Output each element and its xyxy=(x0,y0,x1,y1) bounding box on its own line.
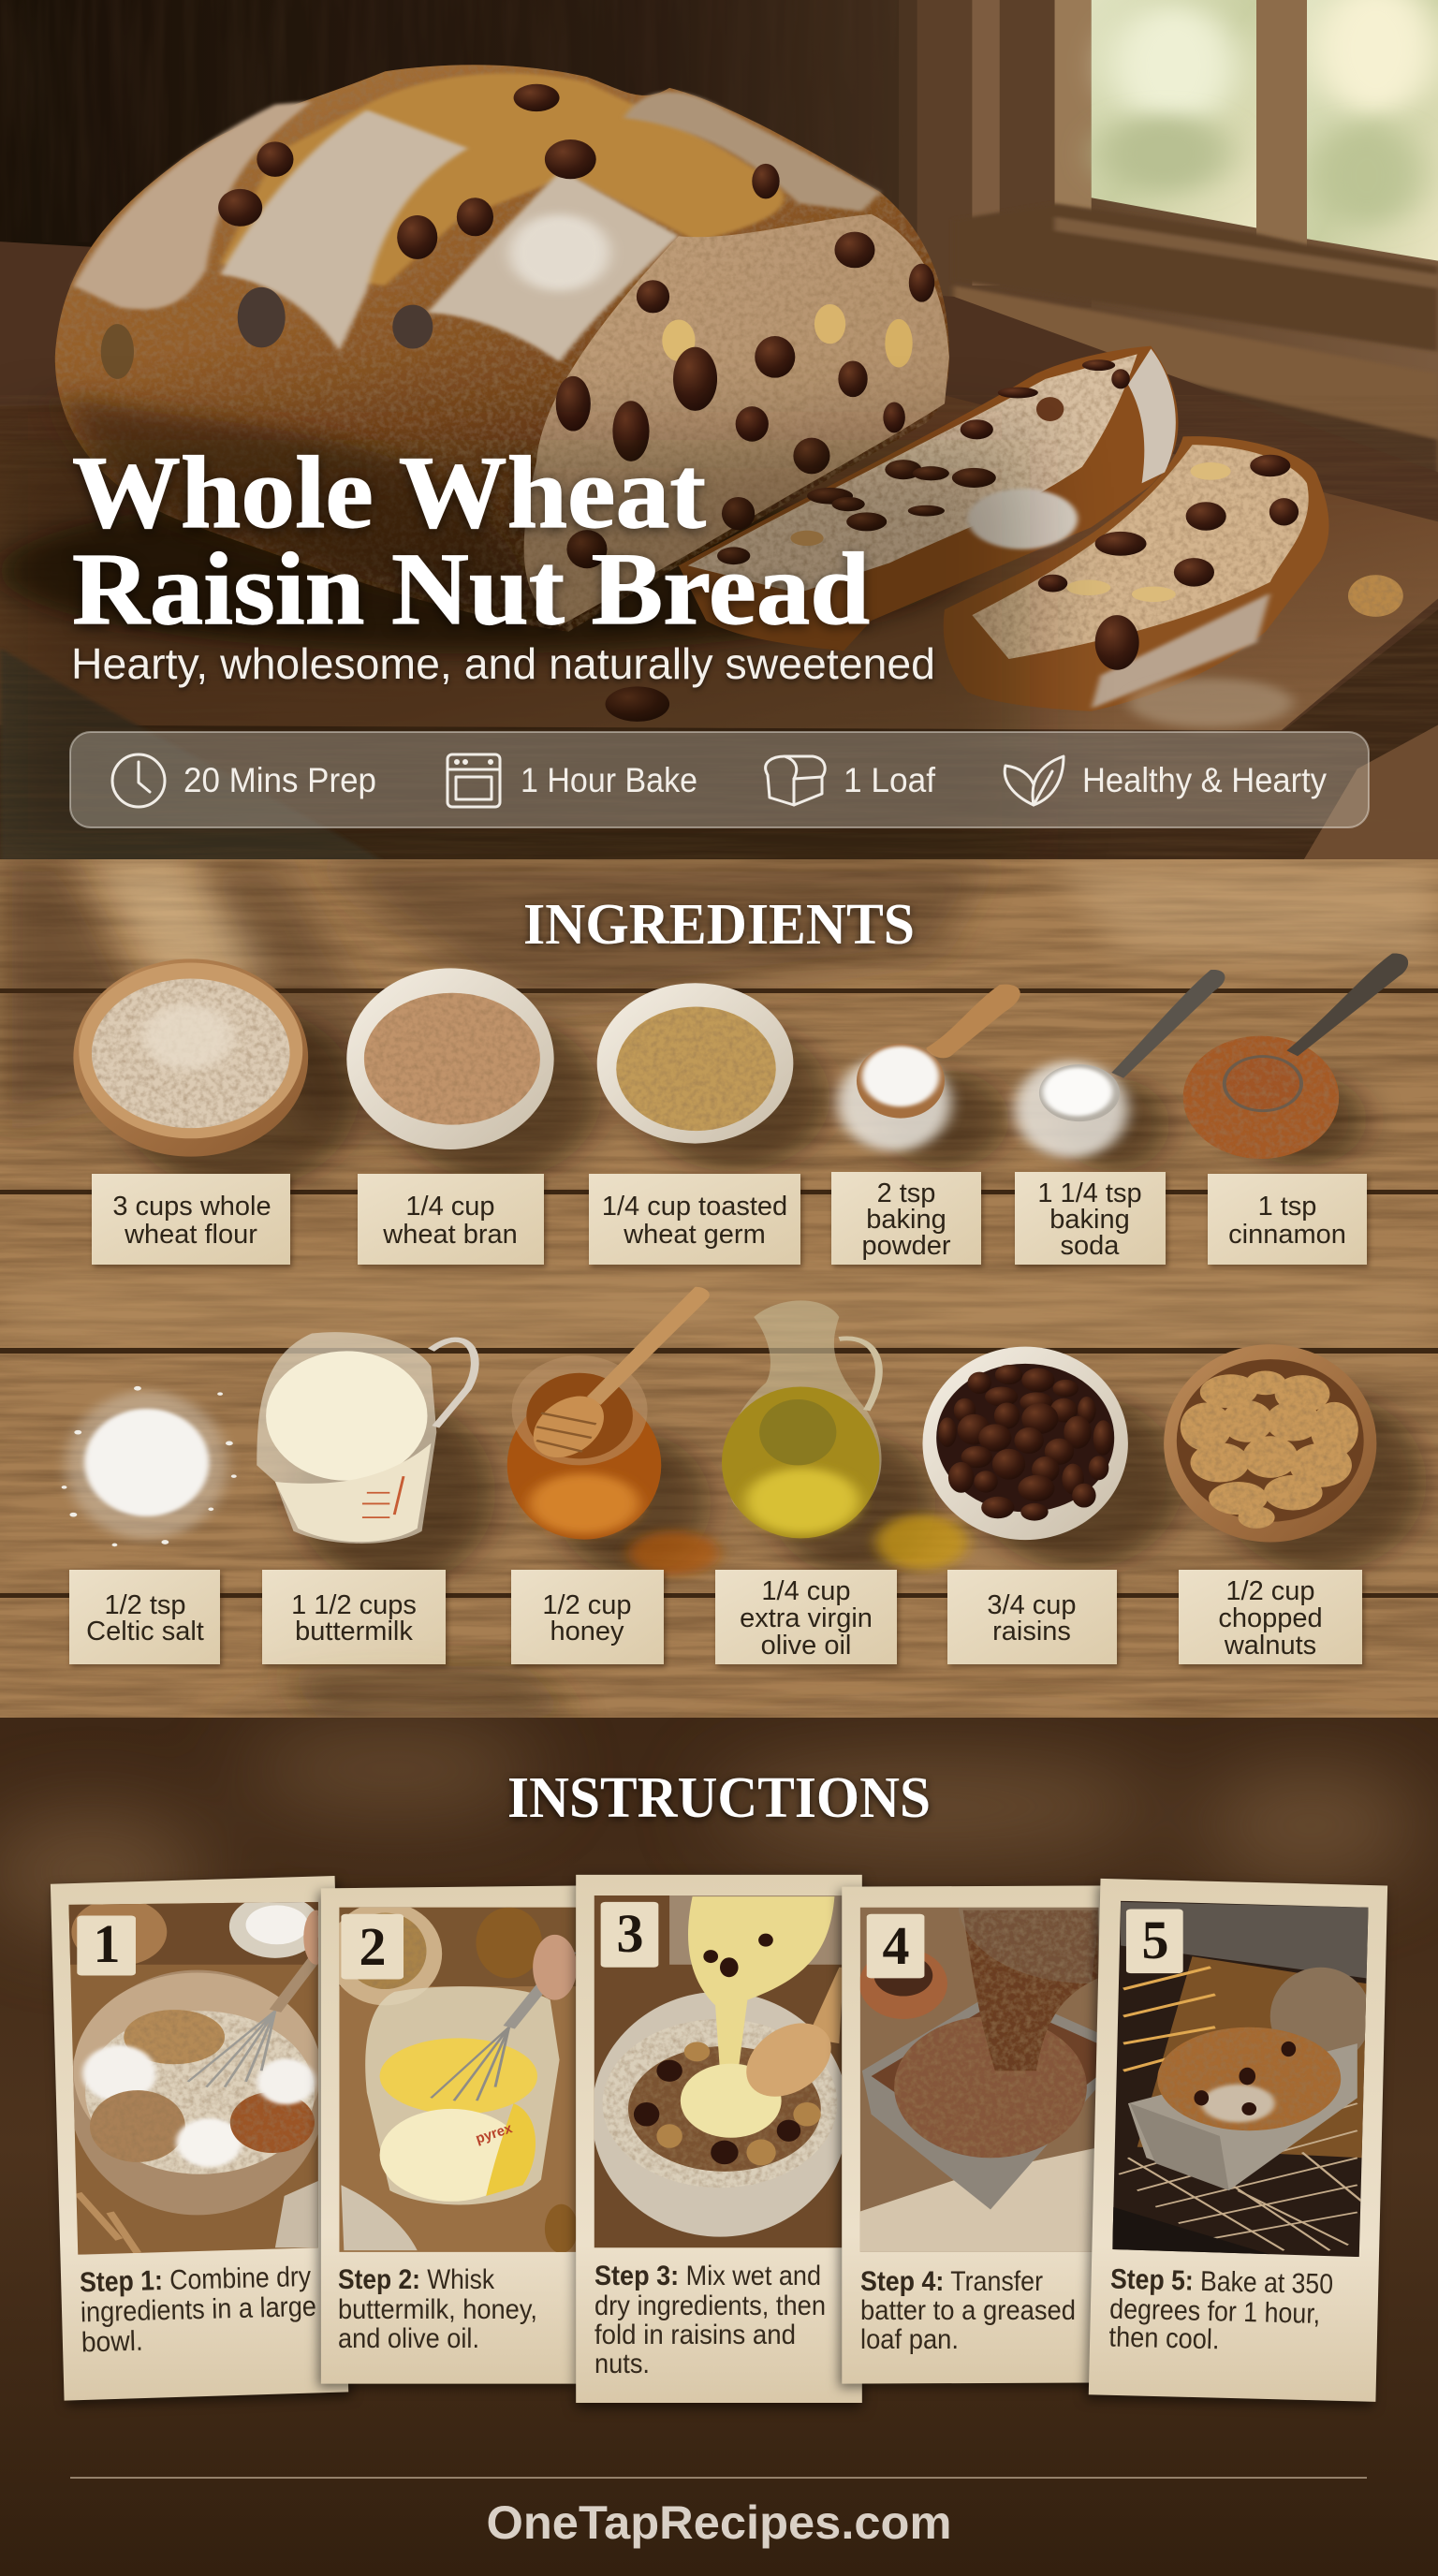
stats bar background xyxy=(70,732,1369,827)
footer website: OneTapRecipes.com xyxy=(487,2496,951,2549)
label: olive oil: 1/4 cup xyxy=(761,1576,851,1606)
photo: folding in raisins xyxy=(592,1894,848,2250)
label: salt: 1/2 tsp xyxy=(104,1590,186,1620)
title line 1: Whole Wheat xyxy=(72,435,706,549)
label: honey: 1/2 cup xyxy=(542,1590,632,1620)
label: germ xyxy=(589,1174,800,1265)
loaf shadow xyxy=(0,489,954,653)
label: baking powder: powder xyxy=(861,1231,951,1261)
celtic salt pile xyxy=(62,1386,237,1546)
row 2 labels xyxy=(69,1570,1362,1664)
panel: ingredients xyxy=(0,859,1438,1718)
health note: Healthy & Hearty xyxy=(1082,761,1327,799)
label: flour: wheat flour xyxy=(124,1220,257,1250)
icon: oven xyxy=(448,754,500,807)
step card 3 xyxy=(576,1875,862,2403)
number tile 5 xyxy=(1126,1909,1183,1973)
label: salt: Celtic salt xyxy=(86,1617,204,1647)
number tile 4 xyxy=(867,1914,924,1978)
title scrim xyxy=(0,440,1030,861)
step 2 text: Step 2: Whisk xyxy=(338,2264,495,2295)
label: walnuts: 1/2 cup xyxy=(1225,1576,1315,1606)
heading: instructions: INSTRUCTIONS xyxy=(507,1766,931,1830)
wood grain xyxy=(0,859,1438,1718)
step 3 text: Step 3: Mix wet and xyxy=(594,2261,821,2291)
step 5 text: then cool. xyxy=(1108,2321,1220,2355)
label: cinnamon: 1 tsp xyxy=(1258,1192,1316,1222)
walnuts xyxy=(1181,1368,1358,1529)
label: baking soda xyxy=(1015,1172,1166,1265)
step card 4 xyxy=(842,1885,1101,2384)
photo: loaf in oven xyxy=(1105,1896,1375,2261)
step 4 text xyxy=(860,2266,1076,2355)
loaf pan xyxy=(1128,2043,1357,2190)
cloth xyxy=(0,648,385,862)
number 1: 1 xyxy=(94,1913,120,1974)
photo: pouring batter xyxy=(858,1905,1101,2253)
number tile 3 xyxy=(601,1902,658,1968)
icon: leaf xyxy=(1005,756,1064,805)
label: baking powder xyxy=(831,1172,981,1265)
oil glow on table xyxy=(876,1515,967,1570)
number tile 2 xyxy=(341,1914,404,1980)
footer divider xyxy=(70,2477,1367,2479)
label: baking powder: 2 tsp xyxy=(877,1178,935,1208)
step 4 text: Step 4: Transfer xyxy=(860,2266,1043,2297)
number 4: 4 xyxy=(882,1915,910,1976)
number 2: 2 xyxy=(360,1916,386,1977)
yield: 1 Loaf xyxy=(844,761,936,799)
step 3 text: dry ingredients, then xyxy=(594,2291,826,2321)
item shadows xyxy=(119,1004,1426,1586)
panel: instructions xyxy=(0,1718,1438,2576)
step card 5 xyxy=(1089,1879,1387,2402)
photo: dry ingredients bowl xyxy=(65,1895,330,2259)
cutting board xyxy=(0,395,1438,736)
label: walnuts xyxy=(1179,1570,1362,1664)
step 5 text: Step 5: Bake at 350 xyxy=(1110,2263,1333,2300)
slice front raisins xyxy=(717,359,1130,564)
heading: ingredients: INGREDIENTS xyxy=(523,893,915,957)
number 3: 3 xyxy=(616,1903,644,1964)
loaf crust xyxy=(55,65,949,632)
step card 2 xyxy=(321,1885,578,2384)
label: olive oil xyxy=(715,1570,897,1664)
buttermilk measuring cup xyxy=(257,1332,475,1544)
title xyxy=(72,435,870,646)
window xyxy=(899,0,1438,521)
honey glow on table xyxy=(628,1531,720,1575)
label: cinnamon xyxy=(1208,1174,1367,1265)
oven rack xyxy=(1119,2103,1362,2250)
label: salt xyxy=(69,1570,220,1664)
step 2 text xyxy=(338,2264,537,2354)
number tile 1 xyxy=(77,1915,136,1975)
flour patches xyxy=(73,92,880,362)
label: baking powder: baking xyxy=(866,1205,946,1235)
walnut on board xyxy=(1348,575,1403,617)
slice back raisins xyxy=(1038,455,1299,670)
bread slice front xyxy=(679,346,1178,651)
raisins xyxy=(101,84,934,568)
wheat bran bowl xyxy=(346,968,554,1149)
golden top crust xyxy=(220,73,785,285)
wood table background xyxy=(0,859,1438,1718)
label: raisins: 3/4 cup xyxy=(987,1590,1077,1620)
label: baking soda: baking xyxy=(1049,1205,1130,1235)
honey jar with dipper xyxy=(507,1287,710,1540)
label: bran: wheat bran xyxy=(382,1220,518,1250)
label: cinnamon: cinnamon xyxy=(1228,1220,1346,1250)
icon: loaf xyxy=(766,756,825,805)
label: baking soda: 1 1/4 tsp xyxy=(1037,1178,1142,1208)
card 4 drawing xyxy=(842,1885,1101,2384)
raisin on board xyxy=(606,686,669,722)
label: bran xyxy=(358,1174,544,1265)
hero photo scene xyxy=(0,0,1438,862)
loaf cut face xyxy=(524,214,949,626)
label: raisins xyxy=(947,1570,1117,1664)
raisins xyxy=(938,1365,1113,1521)
label: olive oil: extra virgin xyxy=(740,1603,873,1633)
stats bar xyxy=(70,732,1369,827)
title line 2: Raisin Nut Bread xyxy=(72,532,870,646)
photo: whisking wet ingredients xyxy=(329,1902,578,2256)
label: flour: 3 cups whole xyxy=(112,1192,271,1222)
label: walnuts: walnuts xyxy=(1224,1631,1316,1661)
ingredient drawings xyxy=(62,953,1426,1586)
whole wheat flour bowl xyxy=(73,959,308,1157)
step 1 text xyxy=(80,2261,317,2358)
label: walnuts: chopped xyxy=(1218,1603,1323,1633)
label: buttermilk: buttermilk xyxy=(295,1617,413,1647)
step card 1 xyxy=(51,1876,348,2401)
step 1 text: bowl. xyxy=(81,2326,143,2358)
label: germ: 1/4 cup toasted xyxy=(602,1192,787,1222)
label: honey: honey xyxy=(550,1617,624,1647)
step 1 text: Step 1: Combine dry xyxy=(80,2261,311,2298)
card 5 drawing xyxy=(1089,1879,1387,2402)
baking powder spoon xyxy=(837,985,1020,1151)
plank seams xyxy=(0,988,1438,1598)
card 2 drawing xyxy=(321,1885,578,2384)
step 4 text: batter to a greased xyxy=(860,2295,1076,2326)
dark blurred background xyxy=(0,1718,1438,2576)
label: buttermilk: 1 1/2 cups xyxy=(291,1590,417,1620)
background light blotches xyxy=(0,1732,1423,1928)
baking soda spoon xyxy=(1014,970,1225,1158)
walnuts bowl xyxy=(1164,1344,1376,1543)
label: olive oil: olive oil xyxy=(761,1631,851,1661)
icon: clock xyxy=(112,754,165,807)
panel: hero banner xyxy=(0,0,1438,862)
table lower xyxy=(0,609,1438,862)
label: flour xyxy=(92,1174,290,1265)
wall grain xyxy=(2,9,13,66)
loaf underside shading xyxy=(65,395,541,615)
pyrex marking: pyrex xyxy=(474,2120,515,2147)
step 2 text: and olive oil. xyxy=(338,2323,479,2354)
wheat germ bowl xyxy=(597,983,793,1144)
board wood grain xyxy=(0,395,1438,862)
subtitle: Hearty, wholesome, and naturally sweetened xyxy=(71,639,935,688)
label: honey xyxy=(511,1570,664,1664)
raisins and nuts xyxy=(634,2042,821,2165)
step 3 text xyxy=(594,2261,826,2379)
bread slice back xyxy=(944,436,1328,711)
label: baking soda: soda xyxy=(1061,1231,1120,1261)
loaf xyxy=(1157,2027,1341,2130)
cinnamon spoon xyxy=(1183,953,1408,1159)
label: germ: wheat germ xyxy=(623,1220,766,1250)
step 1 text: ingredients in a large xyxy=(81,2291,316,2328)
label: bran: 1/4 cup xyxy=(405,1192,495,1222)
raisins bowl xyxy=(922,1347,1128,1540)
salt specks xyxy=(62,1386,237,1546)
dark wall shade xyxy=(358,0,917,234)
bread loaf xyxy=(55,65,949,632)
prep time: 20 Mins Prep xyxy=(183,761,376,799)
step 2 text: buttermilk, honey, xyxy=(338,2294,537,2325)
card 1 drawing xyxy=(51,1876,348,2401)
flour dust xyxy=(1128,679,1293,727)
label: raisins: raisins xyxy=(992,1617,1071,1647)
glowing rack bars xyxy=(1123,1968,1215,2071)
label: buttermilk xyxy=(262,1570,446,1664)
row 1 labels xyxy=(92,1172,1367,1265)
step 5 text xyxy=(1108,2263,1333,2358)
number 5: 5 xyxy=(1142,1910,1168,1970)
bake time: 1 Hour Bake xyxy=(521,761,697,799)
olive oil cruet xyxy=(722,1300,882,1538)
step 4 text: loaf pan. xyxy=(860,2324,959,2355)
card 3 drawing xyxy=(576,1875,862,2403)
light and shadow bands xyxy=(0,859,1438,1718)
table top xyxy=(0,242,1438,730)
step 3 text: fold in raisins and xyxy=(594,2320,796,2350)
step 3 text: nuts. xyxy=(594,2349,650,2379)
step 5 text: degrees for 1 hour, xyxy=(1109,2293,1321,2330)
